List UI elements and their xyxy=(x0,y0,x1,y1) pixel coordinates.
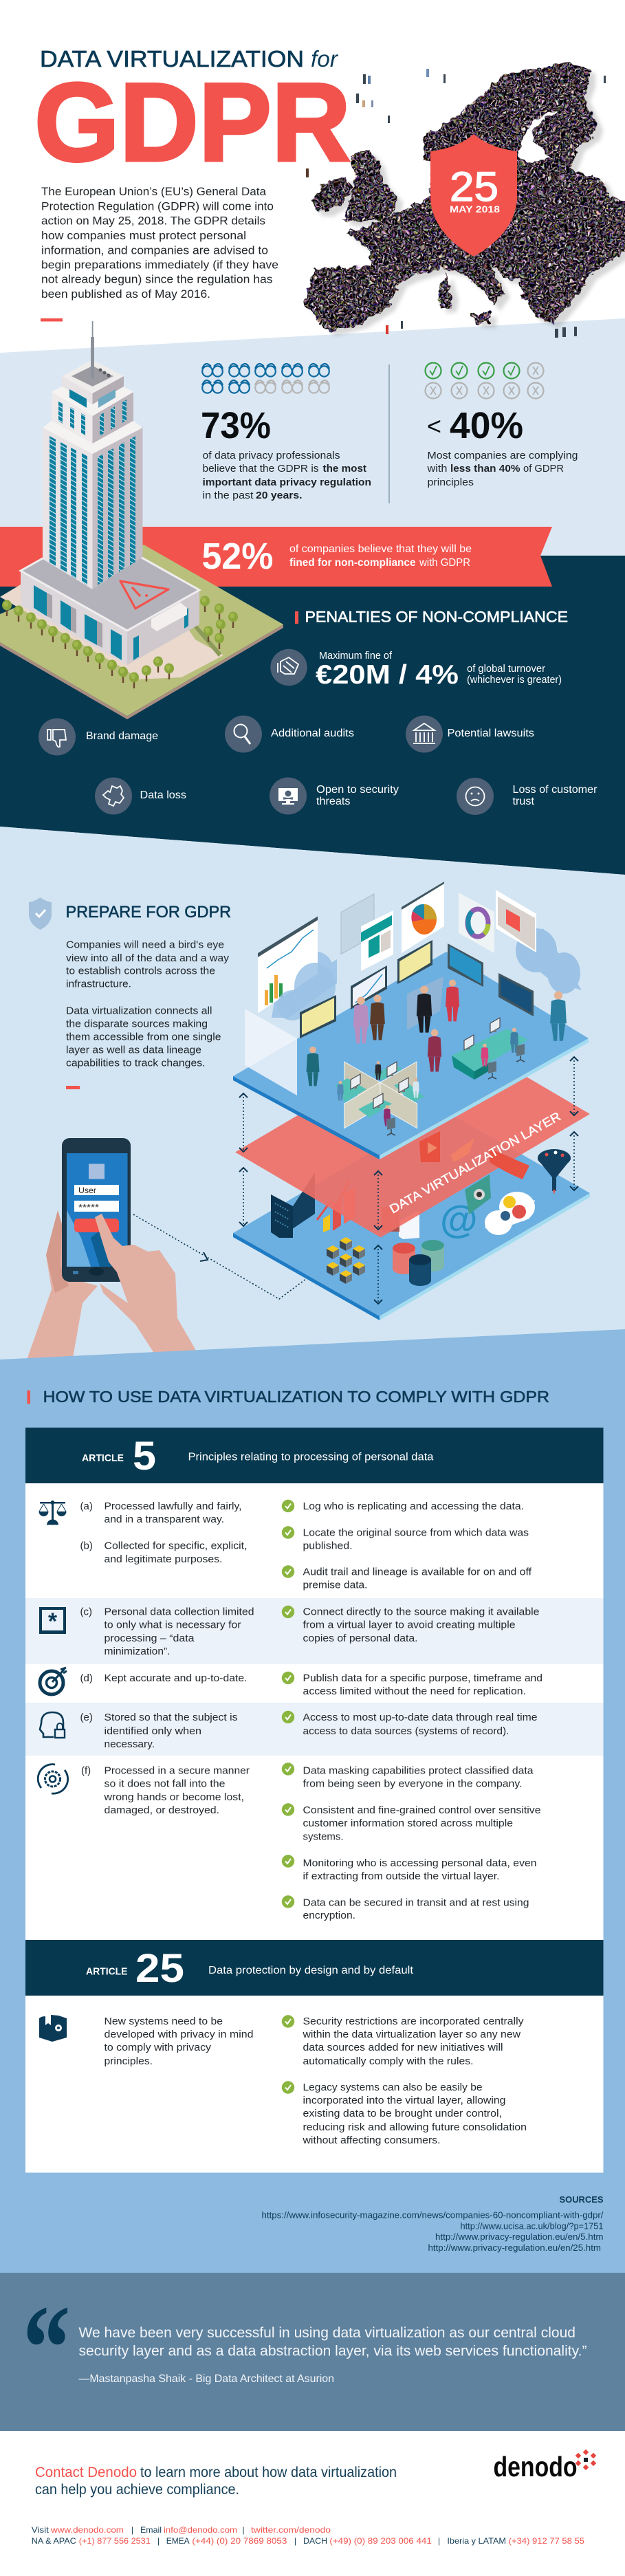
article 25: new systems text: New systems need to be xyxy=(105,2016,223,2027)
accent dash xyxy=(41,318,63,322)
row d: accurate: Kept accurate and up-to-date. xyxy=(105,1672,248,1684)
stat: 73 percent: 73% xyxy=(201,405,271,446)
row f: compliance actions: Consistent and fine-grained control over sensitive xyxy=(303,1804,540,1816)
stat: 73 percent: important data privacy regulation xyxy=(202,477,371,488)
footer contact line 2: | xyxy=(438,2536,440,2546)
chart: donut panel xyxy=(459,893,494,953)
screen: world map xyxy=(448,943,483,987)
icon: shield with check xyxy=(29,897,52,930)
article 25: new systems text: principles. xyxy=(105,2055,153,2067)
presentation board xyxy=(407,976,443,1030)
row c: data minimization xyxy=(80,1606,254,1657)
text: prepare paragraph 2: layer as well as data lineage xyxy=(66,1044,201,1056)
footer contact line 2: (+34) 912 77 58 55 xyxy=(509,2536,584,2546)
heading: penalties of non-compliance: PENALTIES OF NON-COMPLIANCE xyxy=(305,608,568,626)
title: GDPR: GDPR xyxy=(34,61,351,184)
footer contact line 2: Iberia y LATAM xyxy=(447,2536,506,2546)
row a and b: lawful and collected: and in a transparent way. xyxy=(105,1514,224,1525)
row c: compliance action: from a virtual layer to avoid creating multiple xyxy=(303,1619,516,1631)
row e: compliance action: access to data sources (systems of record). xyxy=(303,1725,509,1737)
icon: yellow cubes xyxy=(327,1237,365,1284)
teal desks with workers xyxy=(452,1018,528,1080)
panel: customer quote xyxy=(0,2273,625,2431)
row a and b: lawful and collected xyxy=(80,1500,248,1565)
accent dash xyxy=(66,1086,80,1089)
login field: user: User xyxy=(78,1187,96,1195)
article 25: compliance actions: automatically comply with the rules. xyxy=(303,2055,473,2067)
login field: password: ***** xyxy=(78,1202,99,1212)
row d: accurate: (d) xyxy=(80,1672,93,1684)
stat: 73 percent xyxy=(201,364,371,501)
row a and b: compliance actions: published. xyxy=(303,1540,352,1551)
article 25: new systems text: developed with privacy in mind xyxy=(105,2029,253,2040)
icon: warning triangle on roof xyxy=(120,581,168,609)
row f: compliance actions: customer information stored across multiple xyxy=(303,1818,513,1829)
text: prepare paragraph 1: view into all of the data and a way xyxy=(66,952,230,964)
stat: less than 40 percent: less than 40% xyxy=(450,463,520,474)
row f: secure: wrong hands or become lost, xyxy=(103,1791,244,1803)
chart: red block panel xyxy=(496,890,536,952)
article 25: compliance actions: incorporated into the virtual layer, allowing xyxy=(303,2095,506,2106)
shield: 25 May 2018: 25 xyxy=(450,164,498,210)
panel: how to use background xyxy=(0,1329,625,2273)
row f: compliance actions: if extracting from outside the virtual layer. xyxy=(303,1870,499,1882)
row c: data minimization: Personal data collection limited xyxy=(105,1606,254,1617)
article 5 header: ARTICLE xyxy=(82,1452,124,1464)
call to action: Contact Denodo xyxy=(35,2465,137,2480)
stat: less than 40 percent: Most companies are complying xyxy=(428,450,578,461)
article 5 header xyxy=(25,1428,604,1483)
screen: dark data grid xyxy=(498,973,534,1016)
row a and b: lawful and collected: and legitimate purposes. xyxy=(105,1553,223,1565)
call to action: to learn more about how data virtualization xyxy=(140,2465,397,2480)
penalty: additional audits xyxy=(225,715,354,752)
row a and b: compliance actions: Locate the original source from which data was xyxy=(303,1527,529,1539)
stat: less than 40 percent: 40% xyxy=(450,405,523,446)
heading: prepare for GDPR: PREPARE FOR GDPR xyxy=(66,903,231,921)
article 5 header: 5 xyxy=(133,1434,156,1478)
row e: compliance action: Access to most up-to-date data through real time xyxy=(303,1712,538,1723)
row d: compliance action: Publish data for a specific purpose, timeframe and xyxy=(303,1672,542,1684)
shield: 25 May 2018 xyxy=(430,134,517,256)
article 25: compliance actions: without affecting consumers. xyxy=(302,2135,440,2146)
row f: compliance actions: Data can be secured in transit and at rest using xyxy=(303,1897,529,1909)
shield: 25 May 2018: MAY 2018 xyxy=(450,204,500,215)
icon: data minimization box: * xyxy=(48,1608,58,1635)
penalty: data loss xyxy=(95,777,186,814)
icon: target with arrow xyxy=(40,1668,67,1694)
footer contact line 2: | xyxy=(294,2536,296,2546)
penalty: maximum fine xyxy=(270,649,562,690)
stat: less than 40 percent: principles xyxy=(428,477,474,488)
intro paragraph: action on May 25, 2018. The GDPR details xyxy=(41,215,265,227)
stat: less than 40 percent xyxy=(425,363,578,488)
intro paragraph: been published as of May 2016. xyxy=(41,288,210,301)
row a and b: lawful and collected: Collected for specific, explicit, xyxy=(105,1540,248,1551)
penalty: open to security threats: threats xyxy=(316,796,351,807)
footer contact line 2: | xyxy=(157,2536,160,2546)
intro paragraph: information, and companies are advised to xyxy=(41,245,268,257)
intro paragraph: begin preparations immediately (if they have xyxy=(41,259,278,271)
stat: 73 percent: 20 years. xyxy=(256,490,303,501)
icon: opening quote mark: “ xyxy=(23,2280,70,2416)
sources list xyxy=(261,2195,604,2253)
row c: data minimization: processing – “data xyxy=(105,1633,195,1644)
icon: scales xyxy=(39,1500,66,1525)
sources list: SOURCES xyxy=(560,2195,604,2205)
footer contact line 1: | xyxy=(242,2525,245,2535)
dotted arrows between layers xyxy=(239,1057,578,1304)
chart: teal table panel xyxy=(361,910,393,971)
panel: cloud over chart xyxy=(277,963,336,1020)
article 25 header: 25 xyxy=(135,1946,184,1991)
article 25: new systems text: to comply with privacy xyxy=(105,2042,212,2053)
login button xyxy=(74,1219,119,1232)
row c: data minimization: (c) xyxy=(80,1606,92,1617)
footer contact line 1: | xyxy=(131,2525,133,2535)
row f: secure: (f) xyxy=(81,1765,91,1777)
icon: camera and document xyxy=(382,1175,491,1239)
label: data virtualization layer: DATA VIRTUALIZATION LAYER xyxy=(387,1109,563,1216)
article 5 header: Principles relating to processing of personal data xyxy=(188,1451,434,1463)
panel: customer quote: —Mastanpasha Shaik - Big Data Architect at Asurion xyxy=(78,2373,334,2385)
article 25 header: Data protection by design and by default xyxy=(208,1965,414,1976)
intro paragraph xyxy=(41,186,278,301)
illustration: hand holding phone xyxy=(26,1138,195,1362)
panel: customer quote: We have been very successful in using data virtualization as our central cloud xyxy=(78,2324,575,2341)
map of Europe made of a crowd xyxy=(303,63,625,338)
stat: 52 percent fined: 52% xyxy=(202,536,274,577)
text: prepare paragraph 2: the disparate sources making xyxy=(66,1018,208,1030)
article 25: new systems text xyxy=(105,2016,253,2067)
penalty: maximum fine: (whichever is greater) xyxy=(467,674,562,686)
stat: less than 40 percent: < xyxy=(427,412,441,440)
penalty: loss of customer trust: trust xyxy=(513,796,535,807)
text: prepare paragraph 2: Data virtualization connects all xyxy=(66,1005,212,1016)
phone xyxy=(62,1138,131,1282)
footer contact line 2 xyxy=(32,2536,584,2546)
ribbon: 52 percent xyxy=(0,527,552,587)
heading: how to use data virtualization: HOW TO USE DATA VIRTUALIZATION TO COMPLY WITH GDPR xyxy=(43,1388,549,1406)
icon: head with lock xyxy=(40,1712,65,1738)
login field: user xyxy=(74,1185,119,1195)
penalty: open to security threats xyxy=(270,777,399,814)
stat: 73 percent: of data privacy professionals xyxy=(202,450,340,461)
login field: password xyxy=(74,1201,119,1212)
text: prepare paragraph 1: to establish controls across the xyxy=(66,965,215,976)
stat: 52 percent fined: fined for non-compliance xyxy=(289,557,416,569)
chart: pie panel xyxy=(402,882,444,953)
sources list: https://www.infosecurity-magazine.com/news/companies-60-noncompliant-with-gdpr/ xyxy=(261,2210,604,2220)
article 25: compliance actions: reducing risk and allowing future consolidation xyxy=(303,2121,527,2133)
arrow: phone to data xyxy=(133,1214,307,1299)
row c: compliance action: Connect directly to the source making it available xyxy=(303,1606,539,1617)
stat: less than 40 percent: of GDPR xyxy=(523,463,564,474)
row c: data minimization: to only what is necessary for xyxy=(105,1619,241,1631)
panel: cloud left xyxy=(272,951,337,1018)
footer contact line 2: DACH xyxy=(303,2536,327,2546)
illustration: isometric office tower xyxy=(0,321,283,719)
icon: server rack xyxy=(271,1172,315,1238)
penalty: data loss: Data loss xyxy=(140,789,186,801)
icon: data funnel xyxy=(538,1149,571,1194)
stat: 73 percent: the most xyxy=(323,463,366,474)
row e: identified xyxy=(80,1712,238,1750)
call to action: can help you achieve compliance. xyxy=(35,2482,239,2498)
row f: compliance actions: systems. xyxy=(303,1831,344,1843)
panel: cloud right xyxy=(516,928,582,994)
panel: ghost spreadsheet xyxy=(245,1009,297,1095)
icon: database cylinders xyxy=(393,1240,444,1286)
row f: secure xyxy=(81,1765,250,1816)
sources list: http://www.ucisa.ac.uk/blog/?p=1751 xyxy=(461,2221,604,2231)
row e: identified: Stored so that the subject is xyxy=(105,1712,238,1723)
footer contact line 2: EMEA xyxy=(166,2536,190,2546)
row f: compliance actions xyxy=(282,1762,540,1921)
penalty: potential lawsuits xyxy=(406,715,534,752)
row d: compliance action xyxy=(282,1672,542,1697)
row e: identified: necessary. xyxy=(105,1738,155,1750)
icon: data minimization box xyxy=(39,1607,66,1635)
row f: secure: damaged, or destroyed. xyxy=(105,1804,219,1816)
footer contact line 1: Email xyxy=(140,2525,162,2535)
row d: compliance action: access limited without the need for replication. xyxy=(303,1685,526,1697)
diagram: office platform xyxy=(233,882,589,1159)
row f: compliance actions: from being seen by everyone in the company. xyxy=(303,1778,523,1789)
intro paragraph: Protection Regulation (GDPR) will come into xyxy=(41,201,274,213)
footer contact line 1: twitter.com/denodo xyxy=(251,2525,331,2535)
footer contact line 2: (+44) (0) 20 7869 8053 xyxy=(192,2536,287,2546)
chart: ghost table panel xyxy=(341,894,374,954)
stat: 52 percent fined xyxy=(202,536,472,577)
article 25: compliance actions: existing data to be brought under control, xyxy=(303,2108,502,2119)
row f: compliance actions: encryption. xyxy=(303,1910,355,1921)
footer contact line 2: (+49) (0) 89 203 006 441 xyxy=(329,2536,432,2546)
footer contact line 1: Visit xyxy=(32,2525,50,2535)
text: prepare paragraph 2: them accessible from one single xyxy=(66,1032,221,1043)
article 25 header xyxy=(25,1940,604,1996)
penalty: maximum fine: Maximum fine of xyxy=(319,650,393,662)
article 25: compliance actions: data sources added for new initiatives will xyxy=(303,2042,503,2053)
stat: 73 percent: in the past xyxy=(202,490,254,501)
icon: cloud with gears xyxy=(485,1192,535,1235)
row c: data minimization: minimization”. xyxy=(105,1646,171,1657)
people in office xyxy=(307,980,567,1086)
footer contact line 1 xyxy=(32,2525,331,2535)
stat: 73 percent: believe that the GDPR is xyxy=(202,463,319,474)
text: prepare paragraph 1 xyxy=(66,939,230,990)
row a and b: compliance actions: Log who is replicating and accessing the data. xyxy=(303,1500,524,1512)
footer contact line 2: (+1) 877 556 2531 xyxy=(79,2536,151,2546)
row f: compliance actions: Monitoring who is accessing personal data, even xyxy=(303,1857,536,1869)
article 25: compliance actions: Security restrictions are incorporated centrally xyxy=(303,2016,524,2027)
intro paragraph: The European Union’s (EU’s) General Data xyxy=(41,186,267,198)
sources list: http://www.privacy-regulation.eu/en/5.htm xyxy=(435,2232,604,2242)
row a and b: compliance actions: Audit trail and lineage is available for on and off xyxy=(303,1567,532,1578)
divider xyxy=(389,364,390,503)
article 25: compliance actions xyxy=(282,2015,527,2146)
penalty: brand damage xyxy=(39,718,158,755)
penalty: potential lawsuits: Potential lawsuits xyxy=(447,728,534,739)
article 25: compliance actions: within the data virtualization layer so any new xyxy=(302,2029,520,2040)
screen: chart wall display xyxy=(351,965,387,1009)
panel: navy penalties band xyxy=(0,556,625,875)
screen: yellow grid center xyxy=(397,940,432,984)
title: data virtualization for: DATA VIRTUALIZATION xyxy=(40,46,304,72)
article 25 header: ARTICLE xyxy=(86,1965,128,1978)
sources list: http://www.privacy-regulation.eu/en/25.htm xyxy=(428,2243,601,2253)
penalty: additional audits: Additional audits xyxy=(271,728,354,739)
article 25: compliance actions: Legacy systems can also be easily be xyxy=(303,2082,483,2093)
row a and b: compliance actions: premise data. xyxy=(303,1579,367,1591)
icon: at sign: @ xyxy=(440,1197,478,1241)
penalty: loss of customer trust xyxy=(457,778,597,815)
penalty: maximum fine: of global turnover xyxy=(467,663,545,675)
footer contact line 1: info@denodo.com xyxy=(164,2525,237,2535)
diagram: data sources platform xyxy=(233,1110,590,1320)
panel: customer quote: security layer and as a data abstraction layer, via its web services functionality.” xyxy=(78,2342,587,2359)
panel: light blue stats band xyxy=(0,318,625,564)
stat: 52 percent fined: of companies believe that they will be xyxy=(289,543,472,555)
logo: denodo: denodo xyxy=(494,2451,578,2482)
icon: growth arrow and bars xyxy=(317,1181,355,1232)
footer contact line 1: www.denodo.com xyxy=(50,2525,124,2535)
diagram: red data virtualization layer xyxy=(235,1029,590,1238)
row e: identified: identified only when xyxy=(105,1725,201,1737)
row a and b: lawful and collected: Processed lawfully and fairly, xyxy=(105,1500,242,1512)
row e: compliance action xyxy=(282,1711,538,1737)
footer contact line 2: NA & APAC xyxy=(32,2536,76,2546)
panel: prepare for GDPR background xyxy=(0,827,625,1362)
penalty: brand damage: Brand damage xyxy=(86,730,158,742)
text: prepare paragraph 2: capabilities to track changes. xyxy=(66,1058,205,1069)
row c: compliance action xyxy=(282,1606,539,1644)
title: data virtualization for: for xyxy=(311,46,339,72)
cubicle cross xyxy=(336,1061,424,1135)
text: prepare paragraph 1: Companies will need a bird's eye xyxy=(66,939,224,950)
row a and b: lawful and collected: (b) xyxy=(80,1540,93,1551)
icon: gear with cycle arrows xyxy=(38,1765,68,1793)
stat: 52 percent fined: with GDPR xyxy=(419,557,470,569)
chart: line and bar panel xyxy=(258,916,318,1014)
call to action xyxy=(35,2465,397,2498)
row e: identified: (e) xyxy=(80,1712,93,1723)
penalty: loss of customer trust: Loss of customer xyxy=(513,784,597,796)
stat: less than 40 percent: with xyxy=(426,463,447,474)
penalty: maximum fine: €20M / 4% xyxy=(316,660,459,690)
panel: articles table xyxy=(25,1428,604,2173)
row f: secure: Processed in a secure manner xyxy=(105,1765,250,1777)
row f: compliance actions: Data masking capabilities protect classified data xyxy=(303,1765,534,1777)
intro paragraph: how companies must protect personal xyxy=(41,230,246,242)
text: prepare paragraph 2 xyxy=(66,1005,221,1069)
penalty: open to security threats: Open to security xyxy=(316,784,399,796)
text: prepare paragraph 1: infrastructure. xyxy=(66,978,131,990)
intro paragraph: not already begun) since the regulation has xyxy=(41,274,272,286)
screen: yellow grid left xyxy=(300,995,336,1038)
icon: book with gear xyxy=(39,2015,67,2042)
row a and b: compliance actions xyxy=(282,1500,532,1591)
row a and b: lawful and collected: (a) xyxy=(80,1500,93,1512)
row f: secure: so it does not fall into the xyxy=(105,1778,226,1789)
row c: compliance action: copies of personal data. xyxy=(303,1633,418,1644)
